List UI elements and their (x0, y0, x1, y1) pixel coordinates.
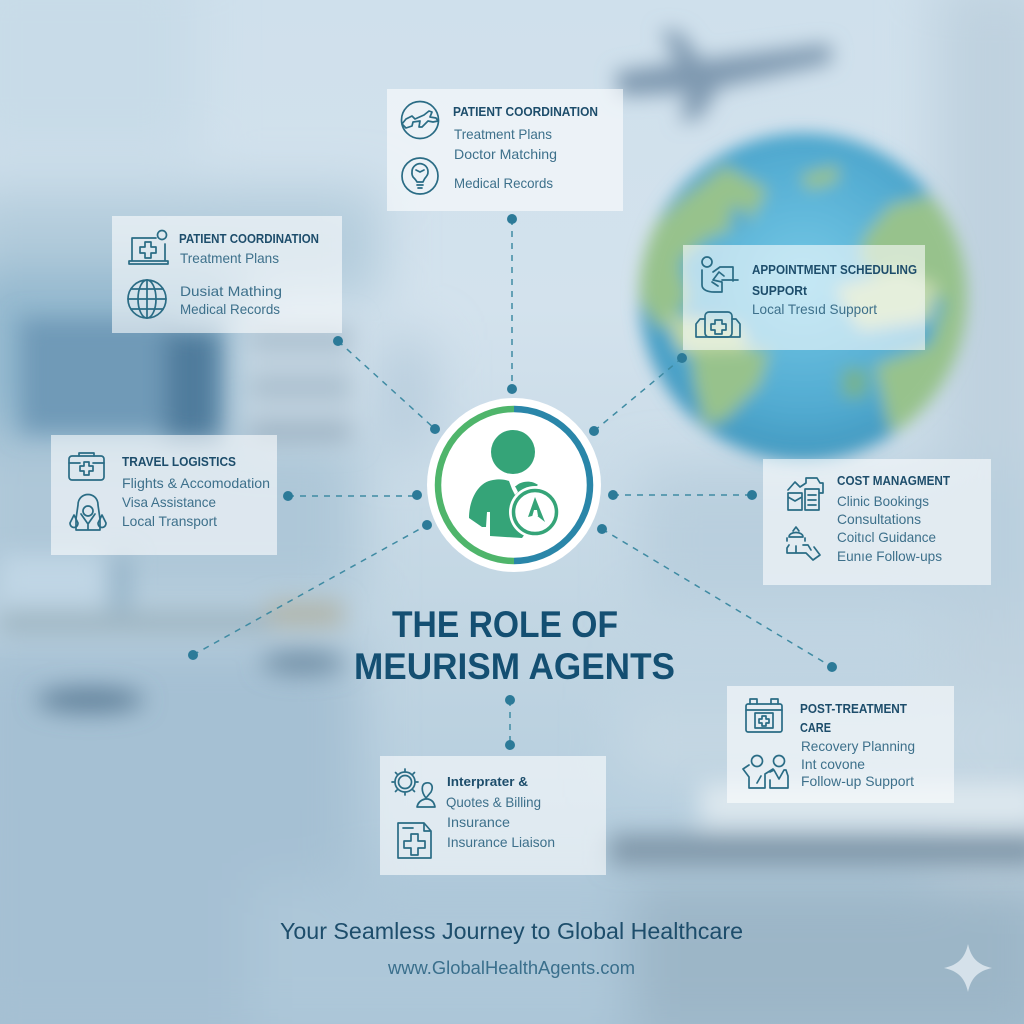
panel: travel logistics: TRAVEL LOGISTICS (122, 454, 236, 469)
panel: appointment scheduling: Local Tresıd Support (752, 301, 877, 317)
panel: travel logistics: Flights & Accomodation (122, 475, 270, 491)
icon: medical kit (696, 312, 740, 337)
title: MEURISM AGENTS (354, 646, 675, 687)
panel: post-treatment care: Int covone (801, 756, 865, 772)
panel: appointment scheduling (683, 245, 925, 350)
icon: two people (743, 756, 788, 788)
panel: interpreter and insurance: Quotes & Billing (446, 794, 541, 810)
panel: cost management: Eunıe Follow-ups (837, 548, 942, 564)
panel: post-treatment care (727, 686, 954, 803)
icon: plane in circle (402, 102, 438, 138)
icon: sparkle star (944, 944, 992, 992)
panel: post-treatment care: Follow-up Support (801, 773, 914, 789)
icon: compass badge (509, 486, 561, 538)
panel: top patient coordination: Medical Records (454, 175, 553, 191)
panel: interpreter and insurance: Interprater & (447, 774, 528, 789)
panel: appointment scheduling: APPOINTMENT SCHEDULING (752, 262, 917, 277)
panel: left patient coordination (112, 216, 342, 333)
website url: www.GlobalHealthAgents.com (387, 958, 635, 978)
icon: calendar case (746, 699, 782, 732)
panel: top patient coordination (387, 89, 623, 211)
panel: top patient coordination: Treatment Plans (454, 126, 552, 142)
panel: travel logistics: Visa Assistance (122, 494, 216, 510)
panel: top patient coordination: Doctor Matching (454, 146, 557, 162)
icon: lightbulb in circle (402, 158, 438, 194)
panel: interpreter and insurance: Insurance (447, 814, 510, 830)
panel: appointment scheduling: SUPPORt (752, 283, 808, 298)
progress ring (438, 409, 590, 561)
title: THE ROLE OF (392, 604, 618, 645)
panel: post-treatment care: POST-TREATMENT (800, 701, 907, 716)
panel: travel logistics: Local Transport (122, 513, 217, 529)
panel: left patient coordination: Medical Records (180, 301, 280, 317)
panel: cost management: Clinic Bookings (837, 493, 929, 509)
panel: cost management: COST MANAGMENT (837, 473, 950, 488)
icon: globe grid (128, 280, 166, 318)
blurred airplane (615, 30, 832, 122)
tagline: Your Seamless Journey to Global Healthcare (280, 918, 743, 944)
icon: laptop with cross (129, 230, 168, 264)
panel: cost management: Coitıcl Guidance (837, 529, 936, 545)
panel: left patient coordination: Treatment Plans (180, 250, 279, 266)
panel: interpreter and insurance: Insurance Liaison (447, 834, 555, 850)
icon: agent with bags (70, 494, 106, 530)
connector lines and dots (188, 214, 837, 750)
icon: travel case (69, 453, 104, 480)
panel: top patient coordination: PATIENT COORDINATION (453, 104, 598, 119)
central agent emblem (427, 398, 601, 572)
panel: post-treatment care: CARE (800, 720, 831, 735)
icon: gear and person (392, 769, 435, 807)
icon: person at board (702, 257, 738, 292)
panel: left patient coordination: PATIENT COORDINATION (179, 231, 319, 246)
title (354, 604, 675, 687)
icon: calendar with cross (398, 823, 431, 858)
panel: interpreter and insurance (380, 756, 606, 875)
blurred globe (639, 133, 975, 461)
icon: envelope and document (788, 478, 823, 510)
panel: cost management: Consultations (837, 511, 921, 527)
panel: cost management (763, 459, 991, 585)
icon: payment hand (787, 527, 820, 560)
panel: travel logistics (51, 435, 277, 555)
panel: left patient coordination: Dusiat Mathing (180, 283, 282, 299)
icon: agent person (469, 430, 538, 538)
panel: post-treatment care: Recovery Planning (801, 738, 915, 754)
